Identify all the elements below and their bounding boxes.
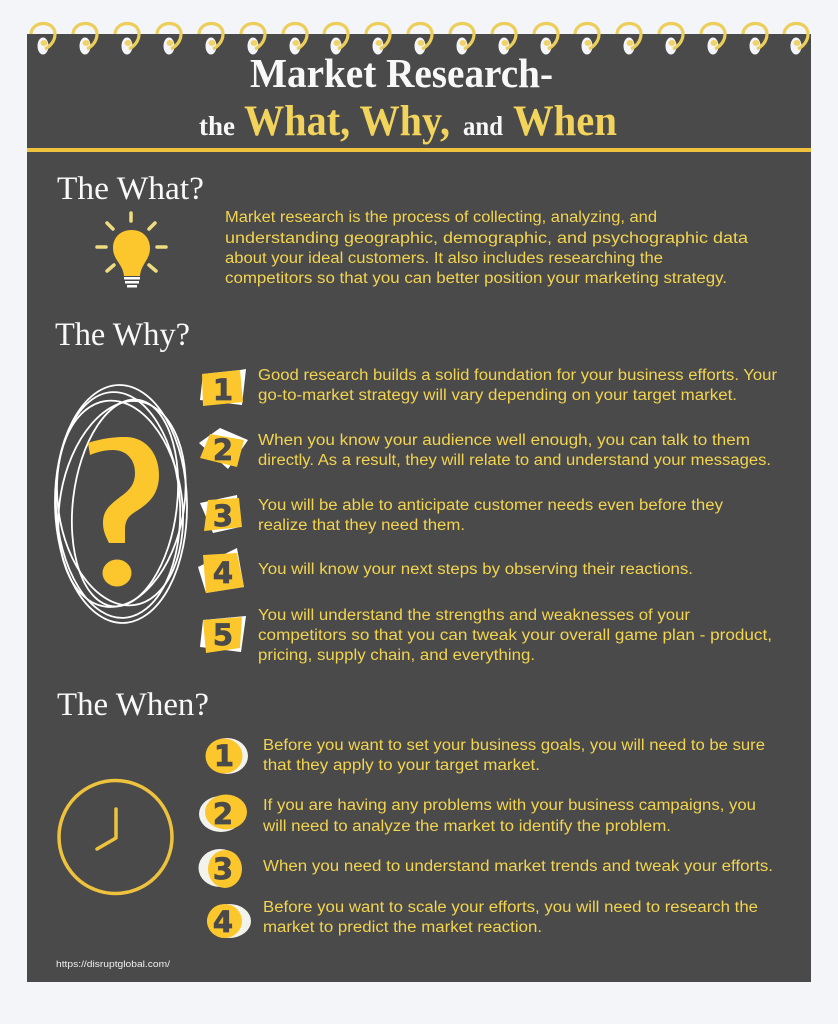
title: the bbox=[199, 111, 235, 141]
why text 2: directly. As a result, they will relate to and understand your messages. bbox=[258, 452, 771, 469]
icon: light bulb bbox=[97, 213, 166, 288]
title bbox=[199, 50, 617, 145]
number badge 3 (why): 3 bbox=[213, 499, 233, 533]
why text 3: You will be able to anticipate customer needs even before they bbox=[258, 497, 723, 514]
number badge 1 (why) bbox=[200, 369, 246, 407]
title underline bbox=[27, 148, 811, 152]
icon: question mark in scribbled ovals bbox=[43, 384, 201, 624]
source url: https://disruptglobal.com/ bbox=[56, 959, 170, 970]
title: What, Why, bbox=[244, 98, 450, 145]
why text 2 bbox=[258, 432, 771, 469]
why text 1: go-to-market strategy will vary depending on your target market. bbox=[258, 387, 737, 404]
number badge 2 (when) bbox=[199, 794, 247, 832]
text: what definition: understanding geographic, demographic, and psychographic data bbox=[225, 230, 748, 247]
text: what definition: competitors so that you can better position your marketing strategy. bbox=[225, 270, 727, 287]
number badge 4 (why): 4 bbox=[213, 556, 233, 590]
text: what definition: about your ideal customers. It also includes researching the bbox=[225, 250, 663, 267]
number badge 4 (when): 4 bbox=[213, 905, 233, 939]
number badge 1 (when): 1 bbox=[214, 739, 234, 773]
icon: clock bbox=[59, 780, 172, 894]
why text 4: You will know your next steps by observing their reactions. bbox=[258, 561, 693, 578]
title: and bbox=[463, 111, 503, 141]
number badge 5 (why): 5 bbox=[213, 618, 233, 652]
why text 3: realize that they need them. bbox=[258, 517, 465, 534]
when text 2 bbox=[262, 797, 756, 835]
when text 4 bbox=[263, 899, 758, 936]
title: Market Research- bbox=[250, 50, 553, 96]
why text 5: pricing, supply chain, and everything. bbox=[258, 647, 535, 664]
number badge 2 (why) bbox=[199, 428, 248, 469]
why text 3 bbox=[258, 497, 723, 534]
why text 1: Good research builds a solid foundation for your business efforts. Your bbox=[258, 367, 777, 384]
number badge 3 (when): 3 bbox=[213, 852, 233, 886]
why text 5: You will understand the strengths and weaknesses of your bbox=[258, 607, 690, 624]
when text 1: Before you want to set your business goals, you will need to be sure bbox=[263, 737, 765, 754]
spiral binding rings bbox=[31, 24, 808, 54]
heading: The When?: The When? bbox=[57, 687, 209, 723]
why text 5: competitors so that you can tweak your overall game plan - product, bbox=[258, 627, 772, 644]
when text 4: market to predict the market reaction. bbox=[263, 919, 542, 936]
when text 1 bbox=[263, 737, 765, 774]
heading: The Why?: The Why? bbox=[55, 317, 190, 353]
text: what definition: Market research is the process of collecting, analyzing, and bbox=[225, 209, 657, 226]
number badge 1 (why): 1 bbox=[213, 373, 233, 407]
when text 3: When you need to understand market trends and tweak your efforts. bbox=[263, 858, 773, 875]
heading: The What?: The What? bbox=[57, 171, 204, 207]
number badge 2 (why): 2 bbox=[213, 433, 233, 467]
text: what definition bbox=[225, 209, 748, 287]
number badge 3 (when) bbox=[198, 849, 242, 888]
when text 4: Before you want to scale your efforts, you will need to research the bbox=[263, 899, 758, 916]
why text 2: When you know your audience well enough, you can talk to them bbox=[258, 432, 750, 449]
title: When bbox=[513, 98, 617, 145]
number badge 5 (why) bbox=[200, 616, 246, 653]
number badge 1 (when) bbox=[206, 738, 248, 774]
number badge 4 (why) bbox=[198, 548, 244, 593]
why text 1 bbox=[258, 367, 777, 404]
number badge 2 (when): 2 bbox=[213, 797, 233, 831]
when text 2: If you are having any problems with your business campaigns, you bbox=[263, 797, 756, 814]
when text 1: that they apply to your target market. bbox=[263, 757, 540, 774]
number badge 3 (why) bbox=[200, 495, 242, 533]
when text 2: will need to analyze the market to identify the problem. bbox=[262, 818, 671, 835]
why text 5 bbox=[258, 607, 772, 664]
number badge 4 (when) bbox=[207, 904, 251, 939]
